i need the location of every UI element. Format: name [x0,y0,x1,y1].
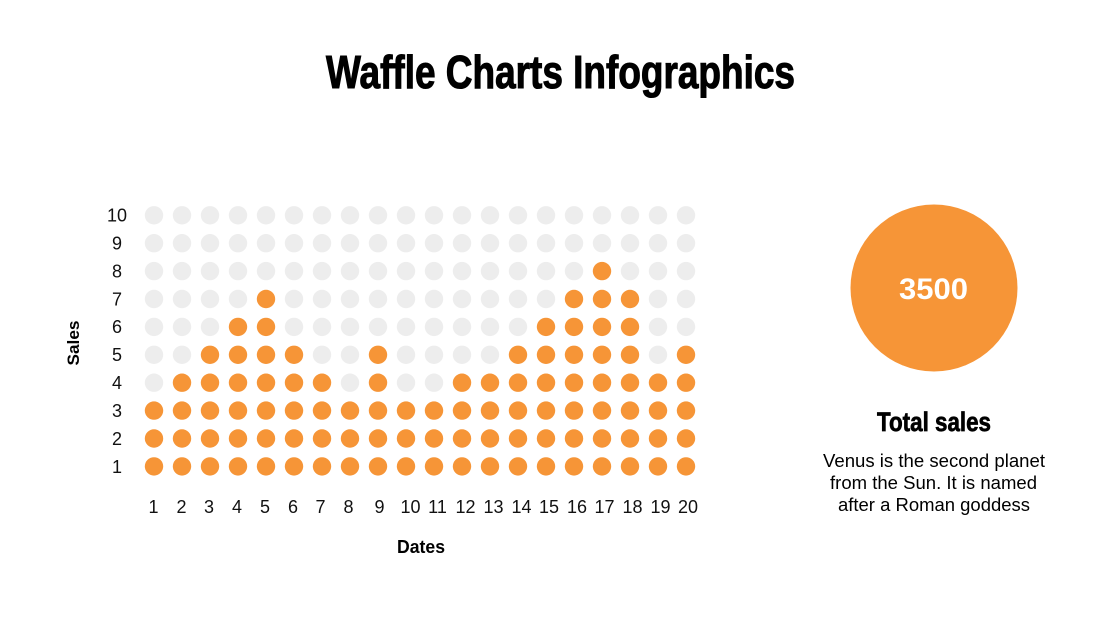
x axis labels: 1 [148,497,159,517]
total sales circle [850,204,1018,372]
y axis labels: 6 [112,317,122,337]
x axis labels: 10 [400,497,421,517]
description text [823,450,1045,515]
row 6 [145,318,695,336]
x axis labels: 2 [176,497,187,517]
x axis labels: 16 [567,497,587,517]
x axis labels: 3 [204,497,214,517]
x axis labels: 9 [374,497,385,517]
description text: after a Roman goddess [838,494,1030,515]
row 2 [145,429,695,448]
x axis labels: 20 [678,497,698,517]
description text: from the Sun. It is named [830,472,1037,493]
row 3 [145,401,695,420]
x axis labels: 15 [539,497,559,517]
total sales heading: Total sales [877,407,991,437]
x axis title: Dates: Dates [397,537,445,557]
y axis labels: 4 [112,373,122,393]
x axis labels [148,497,698,517]
row 8 [145,262,695,280]
y axis labels: 10 [107,206,127,226]
dot grid [145,206,695,476]
x axis labels: 13 [483,497,504,517]
y axis labels: 2 [112,429,122,449]
y axis labels: 3 [112,401,122,421]
y axis labels: 7 [112,290,122,310]
total value: 3500 [899,273,968,306]
x axis labels: 5 [260,497,270,517]
y axis labels: 8 [112,262,122,282]
x axis labels: 17 [594,497,615,517]
row 10 [145,206,695,224]
title: Waffle Charts Infographics [326,46,795,98]
x axis labels: 8 [343,497,354,517]
x axis labels: 12 [455,497,476,517]
y axis labels: 5 [112,345,122,365]
x axis labels: 11 [428,497,447,517]
x axis labels: 19 [650,497,671,517]
y axis labels: 1 [112,457,122,477]
row 1 [145,457,695,476]
row 9 [145,234,695,252]
row 7 [145,290,695,308]
y axis labels: 9 [112,234,122,254]
description text: Venus is the second planet [823,450,1045,471]
y axis labels [107,206,127,477]
x axis labels: 6 [288,497,298,517]
x axis labels: 4 [232,497,242,517]
x axis labels: 7 [315,497,326,517]
y axis title: Sales: Sales [64,320,83,366]
x axis labels: 18 [622,497,643,517]
waffle chart [64,206,698,557]
row 5 [145,346,695,364]
row 4 [145,374,695,392]
x axis labels: 14 [511,497,532,517]
